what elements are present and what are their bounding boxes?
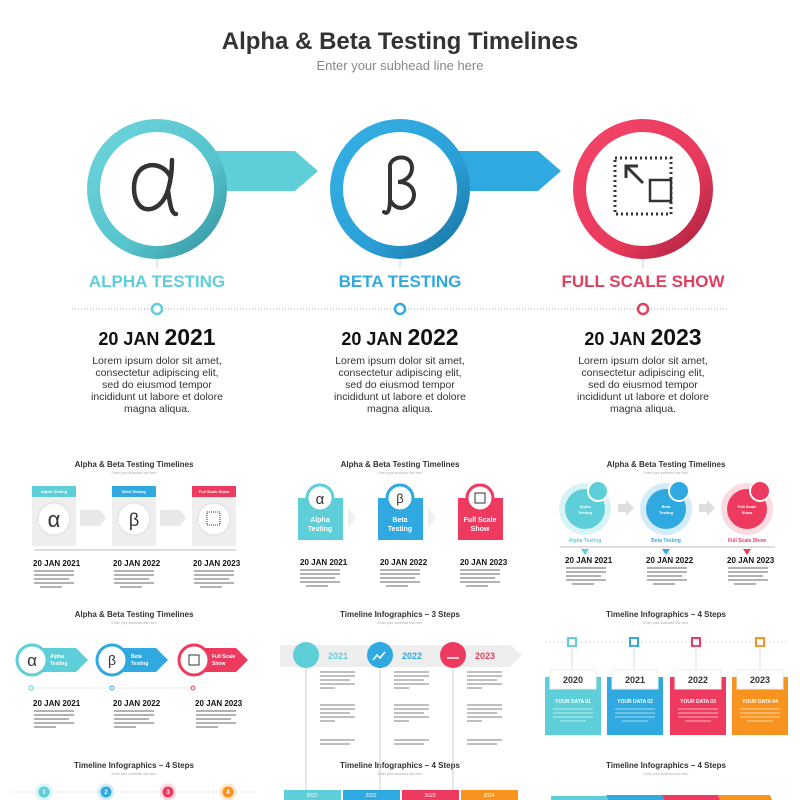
thumbnail 5: 2021	[328, 651, 348, 661]
arrow: alpha to beta	[215, 151, 318, 191]
thumbnail 3: Beta	[662, 504, 671, 509]
arrow: beta to full	[458, 151, 561, 191]
thumbnail 7: 4	[226, 790, 230, 796]
icon: beta	[384, 157, 414, 213]
thumbnail 2: 20 JAN 2021	[300, 558, 348, 567]
thumbnail titles: Alpha & Beta Testing Timelines	[75, 610, 194, 619]
thumbnail 3: Show	[742, 510, 753, 515]
body text: consectetur adipiscing elit,	[95, 367, 219, 379]
thumbnail 4: Beta	[131, 654, 142, 660]
thumbnail 1: 20 JAN 2022	[113, 559, 161, 568]
thumbnail 4: Testing	[131, 661, 148, 667]
thumbnail 8	[284, 790, 518, 800]
thumbnail 6: YOUR DATA 02	[617, 699, 653, 705]
labels: FULL SCALE SHOW	[561, 272, 725, 291]
thumbnail 1: β	[129, 510, 139, 530]
thumbnail titles: Timeline Infographics – 4 Steps	[74, 761, 194, 770]
step: alpha circle	[87, 119, 227, 268]
infographic canvas: Enter your subhead line here	[378, 621, 423, 625]
body text	[91, 355, 709, 415]
thumbnail 4: Alpha	[50, 654, 64, 660]
thumbnail 3	[559, 481, 775, 584]
thumbnail 3: Alpha Testing	[569, 538, 601, 544]
thumbnail 1: 20 JAN 2023	[193, 559, 241, 568]
thumbnail 2: 20 JAN 2023	[460, 558, 508, 567]
body text: consectetur adipiscing elit,	[338, 367, 462, 379]
icon: alpha	[134, 160, 176, 214]
thumbnail 7	[12, 785, 256, 799]
thumbnail 8: 2023	[424, 793, 436, 799]
thumbnail titles: Timeline Infographics – 4 Steps	[606, 610, 726, 619]
infographic canvas: Enter your subhead line here	[112, 621, 157, 625]
subhead: Enter your subhead line here	[317, 58, 483, 73]
dates and text	[98, 324, 702, 350]
thumbnail 5: 2022	[402, 651, 422, 661]
thumbnail titles: Alpha & Beta Testing Timelines	[75, 460, 194, 469]
body text: incididunt ut labore et dolore	[91, 391, 223, 403]
labels: ALPHA TESTING	[89, 272, 225, 291]
thumbnail 4: 20 JAN 2021	[33, 699, 81, 708]
thumbnail 1	[32, 486, 241, 587]
body text: Lorem ipsum dolor sit amet,	[578, 355, 708, 367]
body text: Lorem ipsum dolor sit amet,	[92, 355, 222, 367]
thumbnail 6: 2023	[750, 675, 770, 685]
thumbnail titles: Timeline Infographics – 4 Steps	[340, 761, 460, 770]
thumbnail 9	[551, 795, 772, 800]
thumbnail 2: Testing	[388, 526, 412, 533]
thumbnail 4: Show	[212, 661, 225, 667]
infographic canvas: Enter your subhead line here	[112, 471, 157, 475]
thumbnail 3: Testing	[659, 510, 674, 515]
thumbnail titles	[74, 460, 726, 770]
thumbnail 4: Testing	[50, 661, 67, 667]
thumbnail 3: Alpha	[579, 504, 591, 509]
body text: sed do eiusmod tempor	[588, 379, 698, 391]
thumbnail 8: 2022	[365, 793, 377, 799]
body text: sed do eiusmod tempor	[102, 379, 212, 391]
thumbnail 2	[298, 485, 508, 586]
thumbnail 1: 20 JAN 2021	[33, 559, 81, 568]
thumbnail 2: β	[396, 491, 404, 506]
thumbnail 4	[17, 645, 248, 727]
thumbnail 5	[280, 642, 522, 796]
thumbnail 4: Full Scale	[212, 654, 236, 660]
infographic canvas: Enter your subhead line here	[644, 471, 689, 475]
thumbnail 1: Alpha Testing	[41, 489, 68, 494]
thumbnail 2: Testing	[308, 526, 332, 533]
body text: magna aliqua.	[124, 403, 190, 415]
thumbnail 6: 2021	[625, 675, 645, 685]
infographic canvas: Enter your subhead line here	[644, 621, 689, 625]
dates and text: 20 JAN 2023	[584, 324, 702, 350]
thumbnail 4: 20 JAN 2022	[113, 699, 161, 708]
step: full scale circle	[573, 119, 713, 268]
title: Alpha & Beta Testing Timelines	[222, 28, 578, 55]
thumbnail 1: Beta Testing	[122, 489, 146, 494]
thumbnail 2: Full Scale	[464, 517, 496, 524]
thumbnail 2: Show	[471, 526, 490, 533]
thumbnail 6: YOUR DATA 03	[680, 699, 716, 705]
body text: sed do eiusmod tempor	[345, 379, 455, 391]
infographic canvas: Enter your subhead line here	[378, 772, 423, 776]
thumbnail 8: 2024	[483, 793, 495, 799]
body text: magna aliqua.	[367, 403, 433, 415]
thumbnail 3: Testing	[578, 510, 593, 515]
thumbnail 3: 20 JAN 2022	[646, 556, 694, 565]
body text: incididunt ut labore et dolore	[334, 391, 466, 403]
thumbnail titles: Alpha & Beta Testing Timelines	[341, 460, 460, 469]
thumbnail 1: Full Scale Show	[199, 489, 230, 494]
thumbnail 3: 20 JAN 2021	[565, 556, 613, 565]
thumbnail 5: 2023	[475, 651, 495, 661]
thumbnail 8: 2021	[306, 793, 318, 799]
infographic canvas: Enter your subhead line here	[112, 772, 157, 776]
infographic canvas: Enter your subhead line here	[644, 772, 689, 776]
labels: BETA TESTING	[339, 272, 461, 291]
body text: magna aliqua.	[610, 403, 676, 415]
body text: Lorem ipsum dolor sit amet,	[335, 355, 465, 367]
thumbnail 2: Beta	[392, 517, 408, 524]
thumbnail 4: α	[27, 651, 37, 670]
thumbnail titles: Timeline Infographics – 3 Steps	[340, 610, 460, 619]
thumbnail 2: Alpha	[310, 517, 330, 524]
thumbnail 4: 20 JAN 2023	[195, 699, 243, 708]
thumbnail 1: α	[48, 507, 61, 532]
thumbnail titles: Alpha & Beta Testing Timelines	[607, 460, 726, 469]
thumbnail 4: β	[108, 652, 116, 668]
thumbnail 6	[545, 638, 788, 735]
thumbnail titles: Timeline Infographics – 4 Steps	[606, 761, 726, 770]
thumbnail 6: 2022	[688, 675, 708, 685]
thumbnail 6: 2020	[563, 675, 583, 685]
thumbnail 3: 20 JAN 2023	[727, 556, 775, 565]
icon: scale	[615, 158, 671, 214]
thumbnail 7: 1	[42, 790, 46, 796]
thumbnail 3: Beta Testing	[651, 538, 681, 544]
infographic canvas: Enter your subhead line here	[378, 471, 423, 475]
labels	[89, 272, 725, 291]
body text: consectetur adipiscing elit,	[581, 367, 705, 379]
thumbnail 2: α	[316, 491, 325, 508]
timeline line	[72, 304, 728, 314]
dates and text: 20 JAN 2021	[98, 324, 216, 350]
thumbnail 7: 2	[104, 790, 108, 796]
thumbnail 6: YOUR DATA 04	[742, 699, 778, 705]
thumbnail 3: Full Scale	[738, 504, 757, 509]
thumbnail 3: Full Scale Show	[728, 538, 766, 544]
body text: incididunt ut labore et dolore	[577, 391, 709, 403]
thumbnail 2: 20 JAN 2022	[380, 558, 428, 567]
step: beta circle	[330, 119, 470, 268]
thumbnail 7: 3	[166, 790, 170, 796]
thumbnail 6: YOUR DATA 01	[555, 699, 591, 705]
dates and text: 20 JAN 2022	[341, 324, 459, 350]
